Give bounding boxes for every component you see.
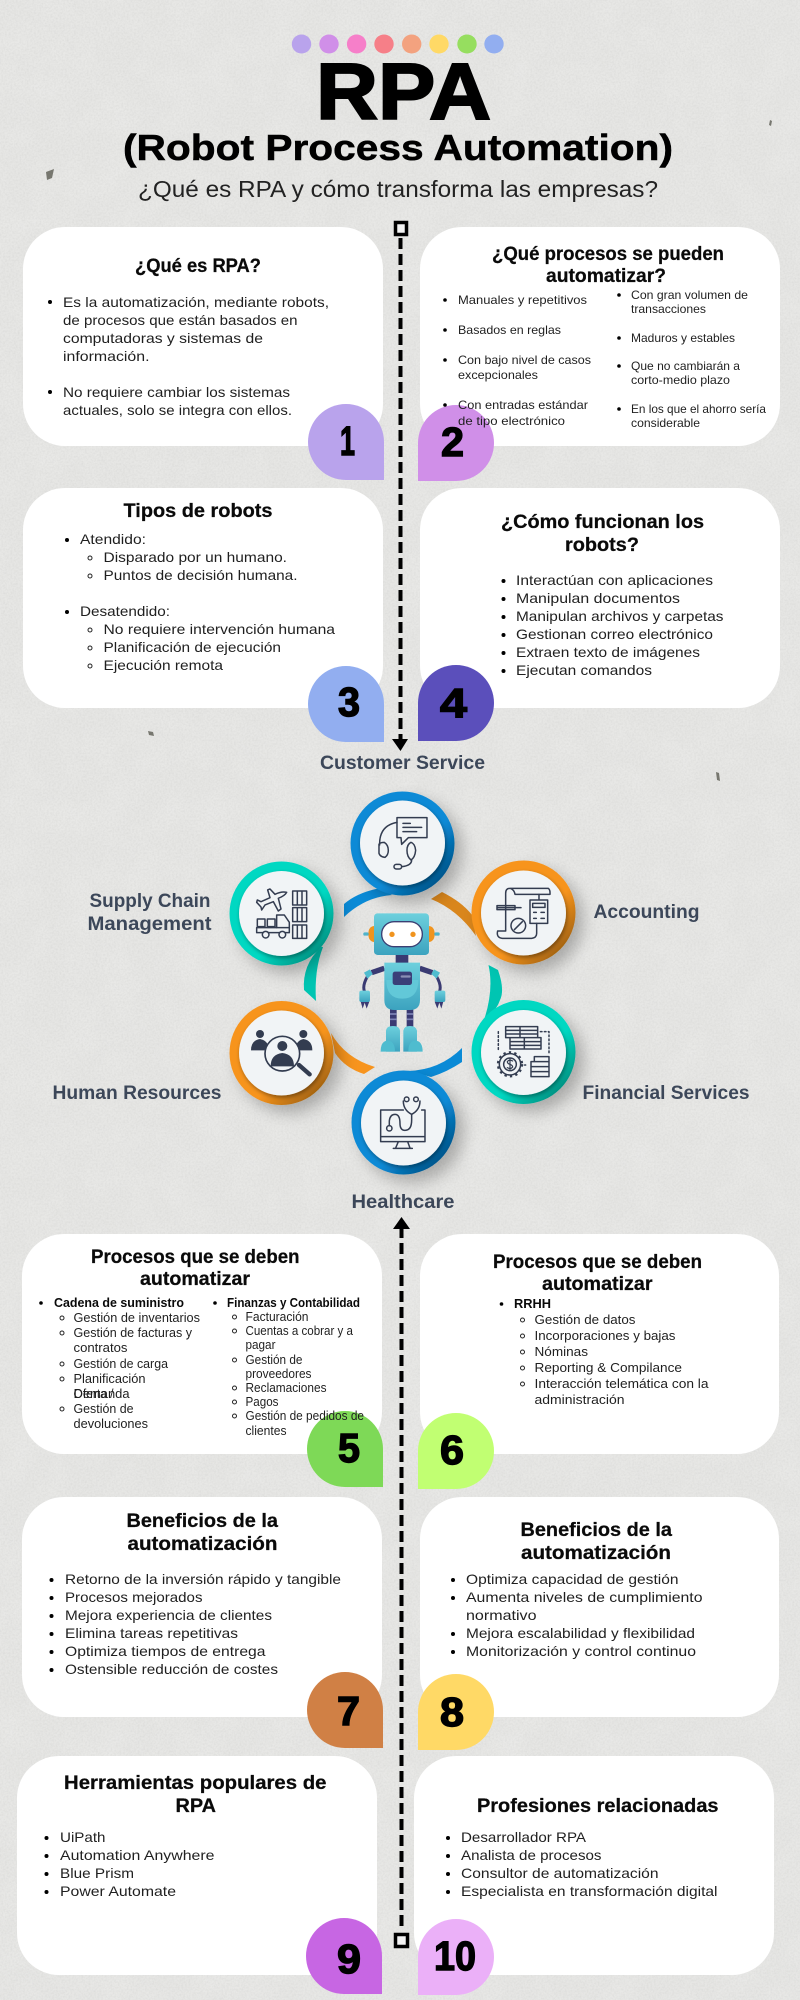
heading: robots? <box>565 535 639 556</box>
list column 1: de tipo electrónico <box>458 414 565 428</box>
list: cadena de suministro: Cadena de suministro <box>54 1296 184 1310</box>
list: cadena de suministro: Gestión de facturas y <box>74 1326 193 1340</box>
heading: Profesiones relacionadas <box>477 1796 718 1817</box>
icon: money, gear and coins <box>498 1027 549 1077</box>
node: supply chain <box>230 862 334 966</box>
list: Gestión de datos <box>534 1313 636 1327</box>
list: cadena de suministro <box>39 1296 200 1431</box>
list: administración <box>534 1393 625 1407</box>
list: Mejora escalabilidad y flexibilidad <box>466 1625 695 1641</box>
list: Ejecución remota <box>104 657 223 673</box>
badge 10 <box>418 1919 494 1995</box>
heading <box>493 1252 702 1295</box>
badge 3: 3 <box>338 679 360 725</box>
list: Analista de procesos <box>461 1847 602 1863</box>
label: customer service: Customer Service <box>320 753 485 774</box>
list column 1: Con entradas estándar <box>458 398 588 412</box>
list: Desatendido: <box>80 603 170 619</box>
label: financial services: Financial Services <box>582 1083 750 1104</box>
icon: headset <box>379 818 427 869</box>
panel: procesos cadena y finanzas <box>22 1234 383 1487</box>
list: Incorporaciones y bajas <box>534 1329 676 1343</box>
list column 1: excepcionales <box>458 368 538 382</box>
list: finanzas y contabilidad: Cuentas a cobrar y a <box>246 1324 353 1338</box>
list: cadena de suministro: Gestión de inventarios <box>74 1311 200 1325</box>
list: Reporting & Compilance <box>534 1361 682 1375</box>
badge 9 <box>306 1918 382 1994</box>
badge 9: 9 <box>337 1936 361 1982</box>
list: Monitorización y control continuo <box>466 1643 696 1659</box>
panel: como funcionan los robots <box>418 488 780 741</box>
tagline: ¿Qué es RPA y cómo transforma las empresas? <box>138 176 658 202</box>
list column 1: Manuales y repetitivos <box>458 293 587 307</box>
list: finanzas y contabilidad: Reclamaciones <box>246 1381 326 1395</box>
list column 2: corto-medio plazo <box>631 373 730 387</box>
badge 7: 7 <box>337 1688 360 1734</box>
heading: Herramientas populares de <box>64 1773 326 1794</box>
heading <box>501 512 704 556</box>
list <box>50 1571 341 1677</box>
heading <box>492 244 724 287</box>
badge 5: 5 <box>338 1425 360 1471</box>
list: finanzas y contabilidad: proveedores <box>246 1367 312 1381</box>
list: Power Automate <box>60 1883 176 1899</box>
list: Extraen texto de imágenes <box>516 644 700 660</box>
badge 2: 2 <box>441 419 464 465</box>
list column 1 <box>443 293 591 428</box>
heading <box>91 1247 300 1290</box>
badge 8 <box>418 1674 494 1750</box>
list: Optimiza tiempos de entrega <box>65 1643 266 1659</box>
list: UiPath <box>60 1829 106 1845</box>
list <box>500 1297 709 1407</box>
list: Gestionan correo electrónico <box>516 626 713 642</box>
heading: Beneficios de la <box>126 1511 278 1532</box>
list: cadena de suministro: Oferta / <box>74 1387 114 1401</box>
list: finanzas y contabilidad: Gestión de pedidos de <box>246 1409 364 1423</box>
badge 10: 10 <box>434 1933 476 1979</box>
list: Mejora experiencia de clientes <box>65 1607 272 1623</box>
heading: ¿Qué es RPA? <box>135 256 261 277</box>
heading: automatización <box>521 1543 671 1564</box>
list <box>451 1571 703 1659</box>
connecting ribbons <box>304 888 502 1077</box>
list: finanzas y contabilidad: Gestión de <box>246 1353 303 1367</box>
badge 7 <box>307 1672 383 1748</box>
list: cadena de suministro: Gestión de <box>74 1402 134 1416</box>
list column 2: Maduros y estables <box>631 331 735 345</box>
list: Manipulan archivos y carpetas <box>516 608 724 624</box>
list column 2: Que no cambiarán a <box>631 359 740 373</box>
heading: Beneficios de la <box>520 1520 672 1541</box>
heading <box>520 1520 672 1564</box>
title: RPA <box>316 47 491 136</box>
list <box>65 531 335 673</box>
panel: tipos de robots <box>23 488 384 742</box>
list: No requiere cambiar los sistemas <box>63 384 290 400</box>
node: financial services <box>472 1000 576 1104</box>
robot illustration <box>359 913 445 1052</box>
list <box>446 1829 718 1899</box>
badge 1 <box>308 404 384 480</box>
list <box>502 572 724 678</box>
list: RRHH <box>514 1297 551 1311</box>
panel: beneficios 2 <box>418 1497 779 1750</box>
badge 6 <box>418 1413 494 1489</box>
list column 2: Con gran volumen de <box>631 288 748 302</box>
label: supply chain management: Management <box>88 914 212 935</box>
list: cadena de suministro: contratos <box>74 1341 128 1355</box>
list column 1: Basados en reglas <box>458 323 561 337</box>
icon: plane, truck and containers <box>257 889 307 938</box>
list: Planificación de ejecución <box>104 639 281 655</box>
list: cadena de suministro: Gestión de carga <box>74 1357 168 1371</box>
list: Procesos mejorados <box>65 1589 202 1605</box>
icon: invoice and calculator <box>497 888 550 938</box>
list: finanzas y contabilidad: clientes <box>246 1424 286 1438</box>
badge 3 <box>308 666 384 742</box>
panel: procesos RRHH <box>418 1234 779 1489</box>
label: supply chain management: Supply Chain <box>90 891 210 912</box>
list: finanzas y contabilidad: Finanzas y Contabilidad <box>227 1296 360 1310</box>
list: finanzas y contabilidad: pagar <box>246 1338 276 1352</box>
panel: que procesos se pueden automatizar <box>418 227 780 481</box>
list: No requiere intervención humana <box>104 621 335 637</box>
node: human resources <box>230 1001 334 1105</box>
heading: ¿Cómo funcionan los <box>501 512 704 533</box>
badge 4 <box>418 665 494 741</box>
badge 4: 4 <box>440 680 467 726</box>
label: healthcare: Healthcare <box>352 1192 454 1213</box>
subtitle: full name: (Robot Process Automation) <box>123 127 673 168</box>
list: finanzas y contabilidad: Facturación <box>246 1310 309 1324</box>
badge 1: 1 <box>340 418 355 464</box>
icon: monitor and stethoscope <box>381 1097 425 1148</box>
list: actuales, solo se integra con ellos. <box>63 402 292 418</box>
heading: RPA <box>176 1796 216 1817</box>
list: Nóminas <box>534 1345 588 1359</box>
list: Consultor de automatización <box>461 1865 658 1881</box>
timeline arrow: bottom <box>393 1217 410 1946</box>
list: Ostensible reducción de costes <box>65 1661 278 1677</box>
header: colour dots <box>292 34 504 54</box>
heading: automatizar <box>542 1274 653 1295</box>
heading <box>126 1511 278 1555</box>
badge 2 <box>418 405 494 481</box>
label: accounting: Accounting <box>594 902 700 923</box>
list: Interacción telemática con la <box>534 1377 709 1391</box>
list: normativo <box>466 1607 537 1623</box>
list <box>48 294 329 418</box>
list column 2: considerable <box>631 416 700 430</box>
heading: Procesos que se deben <box>493 1252 702 1273</box>
list: Blue Prism <box>60 1865 134 1881</box>
list: Interactúan con aplicaciones <box>516 572 713 588</box>
list: finanzas y contabilidad: Pagos <box>246 1395 278 1409</box>
panel: que es RPA <box>23 227 384 480</box>
list: cadena de suministro: Demanda <box>74 1387 130 1401</box>
list: Retorno de la inversión rápido y tangible <box>65 1571 341 1587</box>
list: Manipulan documentos <box>516 590 680 606</box>
list: Puntos de decisión humana. <box>104 567 298 583</box>
list: Ejecutan comandos <box>516 662 652 678</box>
node: healthcare <box>352 1070 456 1174</box>
list: cadena de suministro: Planificación <box>74 1372 146 1386</box>
list: Automation Anywhere <box>60 1847 215 1863</box>
list column 2: transacciones <box>631 302 706 316</box>
heading: automatizar <box>140 1269 251 1290</box>
node: customer service <box>350 792 454 896</box>
list <box>44 1829 215 1899</box>
panel: herramientas populares <box>17 1756 382 1994</box>
heading: Tipos de robots <box>124 501 272 522</box>
list: Optimiza capacidad de gestión <box>466 1571 678 1587</box>
list column 1: Con bajo nivel de casos <box>458 353 591 367</box>
list: Disparado por un humano. <box>104 549 287 565</box>
list column 2 <box>617 288 766 430</box>
badge 8: 8 <box>440 1689 464 1735</box>
node: accounting <box>472 860 576 964</box>
heading: automatizar? <box>546 266 666 287</box>
list: información. <box>63 348 150 364</box>
heading: ¿Qué procesos se pueden <box>492 244 724 265</box>
list: Especialista en transformación digital <box>461 1883 718 1899</box>
list column 2: En los que el ahorro sería <box>631 402 766 416</box>
label: human resources: Human Resources <box>52 1083 221 1104</box>
panel: profesiones relacionadas <box>414 1756 774 1995</box>
list: Aumenta niveles de cumplimiento <box>466 1589 703 1605</box>
badge 6: 6 <box>440 1427 464 1473</box>
list: Atendido: <box>80 531 146 547</box>
timeline arrow: top <box>392 222 408 751</box>
list: Desarrollador RPA <box>461 1829 587 1845</box>
heading <box>64 1773 326 1817</box>
panel: beneficios 1 <box>22 1497 383 1748</box>
list: cadena de suministro: devoluciones <box>74 1417 148 1431</box>
label: supply chain management <box>88 891 212 935</box>
list: computadoras y sistemas de <box>63 330 263 346</box>
list: Elimina tareas repetitivas <box>65 1625 238 1641</box>
heading: automatización <box>128 1534 278 1555</box>
list: de procesos que están basados en <box>63 312 298 328</box>
heading: Procesos que se deben <box>91 1247 300 1268</box>
list: finanzas y contabilidad <box>213 1296 364 1438</box>
badge 5 <box>307 1411 383 1487</box>
list: Es la automatización, mediante robots, <box>63 294 329 310</box>
icon: people under magnifier <box>251 1030 312 1074</box>
